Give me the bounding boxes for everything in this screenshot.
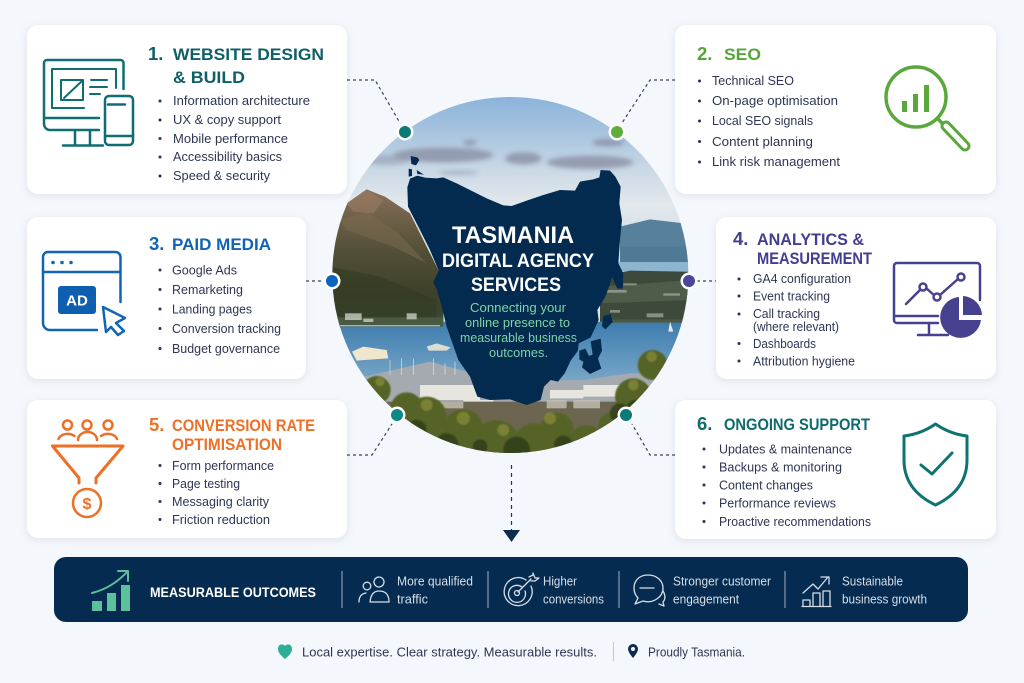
map: offshore islands xyxy=(409,156,613,374)
icon: browser ad with cursor: AD xyxy=(66,292,88,310)
heading: website design: & BUILD xyxy=(173,68,245,87)
list: support items: Proactive recommendations xyxy=(719,515,871,529)
heading: measurable outcomes: MEASURABLE OUTCOMES xyxy=(150,585,316,600)
panel: SEO xyxy=(675,25,996,194)
heading: ongoing support: ONGOING SUPPORT xyxy=(724,415,871,434)
list: conversion items: Page testing xyxy=(172,477,240,491)
outcome: sustainable business growth xyxy=(802,574,927,606)
connector: SEO to hub xyxy=(622,80,675,123)
heading: paid media: PAID MEDIA xyxy=(172,235,271,254)
node: website design xyxy=(396,124,414,140)
heading: analytics: MEASUREMENT xyxy=(757,249,873,268)
list: analytics items: Attribution hygiene xyxy=(753,354,855,368)
heading: website design: 1. xyxy=(148,43,163,64)
hub title: SERVICES xyxy=(471,275,561,296)
list: support items: Updates & maintenance xyxy=(719,442,852,456)
map: Tasmania silhouette xyxy=(407,170,623,405)
icon: growth chart xyxy=(92,571,130,611)
hub subtitle: online presence to xyxy=(465,316,570,330)
outcome: stronger customer engagement xyxy=(634,574,771,606)
list: support items xyxy=(702,442,871,529)
icon: browser ad with cursor xyxy=(43,252,125,335)
heading: paid media: 3. xyxy=(149,233,164,254)
list: support items: Performance reviews xyxy=(719,496,836,510)
list: conversion items: Friction reduction xyxy=(172,513,270,527)
heading: conversion rate xyxy=(149,414,315,454)
footer: divider xyxy=(612,642,614,661)
list: conversion items xyxy=(158,459,274,527)
icon: shield with check xyxy=(904,424,967,505)
node: analytics xyxy=(680,272,698,290)
divider lines xyxy=(342,571,785,608)
outcome: stronger customer engagement: engagement xyxy=(673,592,739,606)
list: paid media items xyxy=(158,264,281,356)
list: SEO items xyxy=(698,74,841,169)
heading: website design: WEBSITE DESIGN xyxy=(173,45,324,64)
hub subtitle: outcomes. xyxy=(489,346,548,360)
photo scene background xyxy=(330,93,690,467)
panel: conversion rate optimisation xyxy=(27,400,347,538)
heading: SEO xyxy=(697,43,761,64)
list: analytics items: GA4 configuration xyxy=(753,272,851,286)
list: website design items: Information architecture xyxy=(173,94,310,108)
heading: SEO: SEO xyxy=(724,45,761,64)
node: paid media xyxy=(324,272,340,290)
hub title: TASMANIA xyxy=(452,222,574,249)
list: conversion items: Messaging clarity xyxy=(172,495,270,509)
icon: funnel with people and coin xyxy=(52,420,123,517)
connector: website design to hub xyxy=(347,80,400,123)
panel: analytics and measurement xyxy=(716,217,996,379)
list: paid media items: Remarketing xyxy=(172,283,243,297)
outcome: more qualified traffic: traffic xyxy=(397,592,428,606)
heading: conversion rate: CONVERSION RATE xyxy=(172,416,315,435)
list: paid media items: Conversion tracking xyxy=(172,322,281,336)
list: support items: Backups & monitoring xyxy=(719,460,842,474)
outcome: sustainable business growth: Sustainable xyxy=(842,574,903,588)
icon: funnel with people and coin: $ xyxy=(83,496,92,513)
connector: ongoing support to hub xyxy=(632,424,675,455)
outcome: higher conversions: Higher xyxy=(543,574,577,588)
footer: tagline: Local expertise. Clear strategy. Measurable results. xyxy=(302,644,597,660)
outcome: higher conversions xyxy=(504,573,604,606)
list: SEO items: Link risk management xyxy=(712,155,841,169)
outcome: more qualified traffic xyxy=(359,574,473,606)
list: SEO items: On-page optimisation xyxy=(712,94,838,108)
list: conversion items: Form performance xyxy=(172,459,274,473)
list: paid media items: Google Ads xyxy=(172,264,237,278)
hub subtitle xyxy=(460,301,577,360)
heading: ongoing support: 6. xyxy=(697,413,712,434)
outcome: stronger customer engagement: Stronger customer xyxy=(673,574,771,588)
heading: analytics: ANALYTICS & xyxy=(757,230,864,249)
outcome: higher conversions: conversions xyxy=(543,592,604,606)
list: website design items xyxy=(158,94,310,183)
list: SEO items: Local SEO signals xyxy=(712,114,813,128)
list: website design items: UX & copy support xyxy=(173,113,282,127)
node: SEO xyxy=(608,124,626,140)
list: SEO items: Technical SEO xyxy=(712,74,794,88)
list: website design items: Speed & security xyxy=(173,169,271,183)
heading: ongoing support xyxy=(697,413,871,434)
panel: measurable outcomes bar xyxy=(54,557,968,622)
heading: conversion rate: OPTIMISATION xyxy=(172,435,282,454)
list: analytics items: Call tracking xyxy=(753,307,820,321)
list: website design items: Accessibility basics xyxy=(173,150,282,164)
list: paid media items: Landing pages xyxy=(172,302,252,316)
heading: analytics xyxy=(733,228,873,268)
icon: monitor and phone xyxy=(44,60,133,146)
arrow: hub down to outcomes xyxy=(503,465,520,542)
list: website design items: Mobile performance xyxy=(173,132,288,146)
heading: analytics: 4. xyxy=(733,228,748,249)
central hub: Tasmania photo circle xyxy=(330,93,690,467)
icon: analytics monitor with pie xyxy=(894,263,982,338)
node: conversion rate xyxy=(388,406,406,424)
panel: website design and build xyxy=(27,25,347,194)
list: support items: Content changes xyxy=(719,478,813,492)
list: SEO items: Content planning xyxy=(712,135,813,149)
panel: paid media xyxy=(27,217,306,379)
list: analytics items xyxy=(738,272,855,368)
footer: Proudly Tasmania: Proudly Tasmania. xyxy=(648,646,745,660)
connector: paid media to hub xyxy=(306,280,325,282)
hub title: DIGITAL AGENCY xyxy=(442,251,594,272)
hub subtitle: measurable business xyxy=(460,331,577,345)
hub title xyxy=(442,222,594,296)
hub subtitle: Connecting your xyxy=(470,301,566,315)
panel: ongoing support xyxy=(675,400,996,539)
outcome: more qualified traffic: More qualified xyxy=(397,574,473,588)
heading: SEO: 2. xyxy=(697,43,712,64)
node: ongoing support xyxy=(618,406,634,424)
list: analytics items: (where relevant) xyxy=(753,320,839,334)
list: analytics items: Event tracking xyxy=(753,290,830,304)
heading: website design xyxy=(148,43,324,87)
list: paid media items: Budget governance xyxy=(172,342,280,356)
heading: conversion rate: 5. xyxy=(149,414,164,435)
connector: analytics to hub xyxy=(697,280,716,282)
outcome: sustainable business growth: business growth xyxy=(842,592,927,606)
icon: magnifier with bars xyxy=(886,67,965,146)
list: analytics items: Dashboards xyxy=(753,337,816,351)
connector: conversion rate to hub xyxy=(347,424,392,455)
